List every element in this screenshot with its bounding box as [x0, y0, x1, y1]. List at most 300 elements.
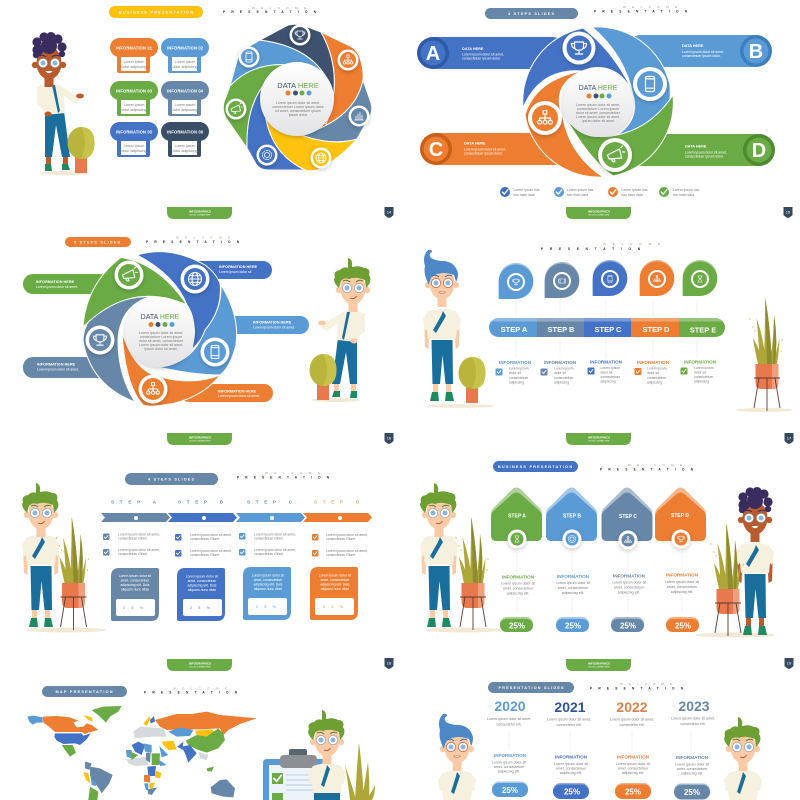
welcome presentation title: PRESENTATION	[594, 10, 688, 14]
bar D: DATA HERE	[685, 144, 707, 148]
year columns: 2020	[494, 698, 526, 714]
centre disc: data here: Lorem ipsum dolor sit amet,	[139, 343, 183, 347]
percentage cards: aliquam nunc vitae	[188, 588, 216, 592]
house step cards: STEP C	[619, 514, 637, 520]
information columns: dolor sit	[509, 371, 521, 375]
year columns: amet, consectetuer	[618, 766, 649, 770]
information columns	[501, 572, 699, 596]
check list row: Lorem Ipsum has	[673, 188, 699, 192]
check list row	[500, 187, 699, 197]
character: man pointing with cactus	[32, 32, 94, 175]
swirl wheel: seven blades	[223, 24, 372, 171]
information columns: adipiscing elit.	[618, 590, 640, 594]
year columns	[487, 698, 715, 800]
welcome presentation title: WELCOME	[620, 682, 672, 686]
card 04: Lorem ipsum	[175, 103, 195, 107]
card 04: INFORMATION 04	[167, 88, 204, 94]
percentage pills	[500, 617, 699, 632]
footer tab	[566, 433, 631, 445]
slide 18: four step arrows	[22, 471, 394, 671]
bar: light blue: INFORMATION HERE	[253, 320, 292, 324]
wheel icons	[226, 24, 370, 168]
clipboard illustration	[263, 749, 328, 800]
centre disc: data here: ipsum dolor sit amet	[582, 119, 614, 123]
centre disc: data here: Lorem ipsum dolor sit amet,	[139, 331, 183, 335]
page number 16	[384, 433, 394, 444]
bar: blue: Lorem ipsum dolor sit	[219, 270, 251, 274]
year columns: INFORMATION	[617, 754, 650, 760]
footer tab: INFOGRAPHICS	[189, 436, 211, 440]
information columns: amet, consectetuer	[614, 586, 645, 590]
centre disc: data here	[563, 67, 633, 137]
centre disc: data here: dolor sit amet, consectetuer	[576, 111, 621, 115]
check list row: two main data	[622, 193, 643, 197]
centre disc: data here: DATA HERE	[141, 314, 180, 321]
year columns: consectetur elit.	[680, 722, 706, 726]
connector dots	[517, 552, 682, 614]
bar B: Lorem ipsum dolor sit amet,	[682, 50, 724, 54]
percentage cards: 25%	[256, 605, 277, 609]
check list row: Lorem Ipsum has	[514, 188, 540, 192]
centre disc: data here: consectetuer Lorem ipsum	[577, 107, 619, 111]
character: man with plant	[308, 710, 375, 800]
information columns: Lorem ipsum dolor sit	[612, 580, 646, 584]
centre disc: data here	[260, 62, 334, 136]
information columns: adipiscing elit.	[562, 591, 584, 595]
chevron timeline	[101, 513, 372, 522]
checklists: consectetuer Etiam.	[190, 553, 220, 557]
check list row: Lorem Ipsum has	[567, 188, 593, 192]
percentage pills: 25%	[675, 622, 691, 630]
centre disc: data here: DATA HERE	[579, 85, 618, 92]
year columns: 25%	[625, 788, 641, 796]
percentage pills: 25%	[620, 622, 636, 630]
page number 17	[784, 433, 794, 444]
bar: blue: INFORMATION HERE	[219, 265, 258, 269]
page number 17: 17	[787, 436, 792, 440]
bar: green: INFORMATION HERE	[36, 280, 75, 284]
step labels: STEP D	[314, 500, 360, 504]
character: man standing	[423, 250, 495, 408]
card 06	[161, 122, 209, 157]
centre disc: data here: consectetuer Lorem ipsum	[140, 335, 182, 339]
checklists: Lorem ipsum dolor sit amet,	[190, 533, 232, 537]
character: man pointing with cactus	[310, 258, 370, 402]
welcome presentation title	[146, 236, 240, 244]
welcome presentation title	[144, 686, 238, 694]
card 01: Lorem ipsum	[124, 60, 144, 64]
information columns: dolor sit	[647, 371, 659, 375]
slide 15: four part wheel	[417, 5, 792, 219]
year columns: Lorem ipsum dolor sit	[492, 760, 526, 764]
year columns: Lorem ipsum dolor sit	[675, 762, 709, 766]
year columns: consectetur elit.	[556, 723, 582, 727]
character: green haired man	[724, 717, 762, 800]
heading pill: business presentation: BUSINESS PRESENTATION	[498, 465, 572, 469]
information columns: amet, consectetuer	[667, 585, 698, 589]
check list row: two main data	[514, 193, 535, 197]
information columns: consectetuer	[647, 376, 667, 380]
centre disc: data here: Lorem ipsum dolor sit amet,	[276, 101, 320, 105]
percentage cards: Lorem ipsum dolor sit	[119, 574, 151, 578]
year columns: consectetur elit.	[619, 723, 645, 727]
check list row: Lorem Ipsum has	[622, 188, 648, 192]
information columns: consectetuer	[509, 376, 529, 380]
welcome presentation title	[590, 682, 684, 690]
percentage pills: 25%	[509, 622, 525, 630]
percentage cards: adipiscing elit. Duis	[320, 582, 350, 586]
welcome presentation title: PRESENTATION	[144, 690, 238, 694]
plant on stand	[736, 298, 792, 412]
house step cards: STEP A	[508, 514, 526, 520]
character: man standing with plant	[420, 483, 503, 632]
year columns: INFORMATION	[494, 753, 527, 758]
welcome presentation title	[237, 471, 330, 480]
information columns: INFORMATION	[613, 574, 646, 578]
information columns: consectetuer	[554, 376, 574, 380]
welcome presentation title: PRESENTATION	[590, 686, 684, 690]
year columns: amet, consectetuer	[677, 767, 708, 771]
year columns: adipiscing elit.	[681, 772, 703, 776]
welcome presentation title: WELCOME	[265, 471, 320, 475]
bar A	[417, 37, 568, 69]
bar C: Lorem ipsum dolor sit amet,	[464, 148, 506, 152]
checklists: consectetuer Etiam.	[254, 536, 284, 540]
welcome presentation title: PRESENTATION	[223, 10, 317, 14]
welcome presentation title	[541, 242, 660, 251]
centre disc: data here: ipsum dolor	[289, 113, 308, 117]
bar C: C	[429, 139, 443, 161]
heading pill: map presentation: MAP PRESENTATION	[56, 690, 113, 694]
percentage cards: 25%	[190, 606, 211, 610]
welcome presentation title: WELCOME	[603, 242, 660, 246]
page number 14	[384, 207, 394, 218]
welcome presentation title	[594, 5, 688, 14]
card 06: INFORMATION 06	[167, 130, 204, 134]
footer tab	[167, 207, 232, 219]
welcome presentation title: PRESENTATION	[146, 240, 240, 244]
year columns: amet, consectetuer	[494, 765, 525, 769]
swirl wheel: five blades	[83, 252, 237, 406]
information columns: INFORMATION	[590, 360, 623, 364]
percentage cards: amet, consectetuer	[121, 578, 150, 582]
card 06: dolor adipiscing	[173, 149, 197, 153]
information columns: adipiscing	[509, 380, 524, 384]
bar: orange	[180, 384, 273, 402]
card 05	[110, 122, 158, 157]
welcome presentation title: WELCOME	[623, 5, 677, 9]
bar D: D	[752, 140, 766, 162]
information columns: adipiscing elit.	[507, 592, 529, 596]
step bar: STEP E	[690, 326, 716, 334]
information columns: adipiscing	[647, 380, 662, 384]
year columns: adipiscing elit.	[560, 771, 582, 775]
checklists: Lorem ipsum dolor sit amet,	[118, 548, 160, 552]
year columns: Lorem ipsum dolor sit amet,	[487, 717, 531, 721]
year columns: consectetur elit.	[496, 722, 522, 726]
bar D: consectetuer ipsum dolor.	[685, 154, 724, 158]
percentage cards: amet, consectetuer	[188, 579, 217, 583]
year columns: adipiscing elit.	[498, 770, 520, 774]
information columns: INFORMATION	[557, 574, 590, 579]
checklists: Lorem ipsum dolor sit amet,	[190, 549, 232, 553]
information columns: INFORMATION	[544, 360, 577, 365]
slide 16: five part wheel	[23, 236, 394, 445]
checklists: consectetuer Etiam.	[326, 537, 356, 541]
percentage cards	[111, 567, 358, 621]
check list row: two main data	[673, 193, 694, 197]
footer tab: INFOGRAPHICS	[588, 436, 610, 440]
bar B: B	[749, 41, 763, 63]
information columns: INFORMATION	[637, 360, 670, 365]
checklists: consectetuer Etiam.	[326, 553, 356, 557]
step bar	[489, 318, 725, 337]
information columns: adipiscing	[554, 380, 569, 384]
page number 18	[384, 658, 394, 669]
centre disc: data here: ipsum dolor sit amet,	[144, 347, 178, 351]
checklists: Lorem ipsum dolor sit amet,	[326, 533, 368, 537]
information columns: Lorem ipsum dolor sit	[556, 581, 590, 585]
footer tab: BLOCKS COMPANY HERE	[589, 666, 610, 668]
footer tab: INFOGRAPHICS	[588, 210, 610, 214]
bar C: consectetuer ipsum dolor.	[464, 152, 503, 156]
information columns: Lorem ipsum	[647, 366, 667, 370]
world map	[27, 706, 257, 800]
welcome presentation title: PRESENTATION	[541, 247, 641, 251]
year columns: Lorem ipsum dolor sit	[616, 762, 650, 766]
card 01	[110, 38, 158, 73]
house step cards: STEP D	[671, 513, 689, 519]
percentage cards: aliquam nunc vitae	[254, 587, 282, 591]
information columns: Lorem ipsum dolor sit	[501, 582, 535, 586]
slide: timeline years	[438, 682, 762, 800]
character: blue haired man	[438, 714, 476, 800]
information columns: consectetuer	[600, 375, 621, 379]
welcome presentation title: PRESENTATION	[600, 468, 694, 472]
checklists: Lorem ipsum dolor sit amet,	[118, 532, 160, 536]
footer tab	[566, 659, 631, 671]
bar: blue	[170, 261, 272, 279]
footer tab: BLOCKS COMPANY HERE	[589, 440, 610, 442]
checklists: consectetuer Etiam.	[254, 552, 284, 556]
page number 19	[784, 658, 794, 669]
page number 19: 19	[787, 660, 792, 666]
information columns: INFORMATION	[684, 360, 717, 364]
page number 18: 18	[387, 660, 392, 666]
bar: light blue	[215, 316, 309, 334]
heading pill: 4 steps slides: 4 STEPS SLIDES	[148, 478, 195, 482]
slide 19: four step houses	[420, 461, 794, 671]
card 06: Lorem ipsum	[175, 144, 195, 148]
centre disc: data here: consectetuer Lorem ipsum dolor	[272, 105, 324, 109]
information columns: dolor sit	[554, 371, 566, 375]
footer tab: BLOCKS COMPANY HERE	[190, 214, 211, 216]
year columns: 2022	[616, 699, 648, 715]
wheel icons	[528, 32, 667, 172]
card 05: Lorem ipsum	[124, 144, 144, 148]
percentage cards: adipiscing elit. Duis	[120, 583, 150, 587]
heading pill: 5 steps slides	[65, 237, 131, 247]
information columns: Lorem ipsum	[509, 366, 529, 370]
year columns: amet, consectetuer	[556, 766, 587, 770]
slide: map presentation	[27, 686, 375, 800]
bar: slate: INFORMATION HERE	[37, 362, 76, 366]
information columns: adipiscing	[694, 380, 709, 384]
year columns: 2023	[678, 698, 710, 714]
welcome presentation title: WELCOME	[252, 6, 306, 10]
percentage cards: Lorem ipsum dolor sit	[186, 574, 218, 578]
heading pill: map presentation	[42, 686, 127, 697]
card 04: dolor adipiscing	[173, 108, 197, 112]
bar A: A	[426, 43, 440, 65]
bar C: DATA HERE	[464, 142, 486, 146]
step labels: STEP A	[111, 500, 157, 504]
welcome presentation title	[600, 463, 694, 472]
year columns: Lorem ipsum dolor sit amet,	[671, 716, 715, 720]
checklists	[103, 532, 368, 557]
footer tab: BLOCKS COMPANY HERE	[190, 666, 211, 668]
centre disc: data here: Lorem ipsum dolor sit amet,	[576, 103, 620, 107]
heading pill: 4 steps slides: 4 STEPS SLIDES	[508, 12, 555, 16]
footer tab: INFOGRAPHICS	[189, 662, 211, 666]
step bar: STEP C	[595, 325, 622, 334]
heading pill: business presentation	[493, 461, 578, 472]
footer tab: BLOCKS COMPANY HERE	[190, 440, 211, 442]
card 01: dolor adipiscing	[122, 65, 146, 69]
centre disc: data here: DATA HERE	[277, 81, 319, 90]
page number 14: 14	[387, 210, 392, 214]
percentage pills: 25%	[565, 622, 581, 630]
information columns: consectetuer	[694, 375, 714, 379]
bar A: Lorem ipsum dolor sit amet,	[462, 52, 504, 56]
information columns: INFORMATION	[666, 572, 699, 578]
bar C	[420, 133, 571, 165]
percentage cards: amet, consectetuer	[254, 578, 283, 582]
card 03: Lorem ipsum	[124, 103, 144, 107]
footer tab	[566, 207, 631, 219]
checklists: consectetuer Etiam.	[190, 537, 220, 541]
card 05: INFORMATION 05	[116, 130, 153, 134]
percentage cards: 25%	[323, 605, 344, 609]
heading pill: 4 steps slides	[485, 8, 578, 19]
information columns: Lorem ipsum dolor sit	[665, 580, 699, 584]
step bar: STEP A	[501, 325, 528, 334]
year columns: 2021	[554, 699, 586, 715]
bar: orange: INFORMATION HERE	[218, 390, 257, 394]
house step cards: STEP B	[563, 514, 581, 520]
percentage cards: 25%	[123, 606, 144, 610]
heading pill: presentation slides: PRESENTATION SLIDES	[498, 686, 564, 690]
bar: light blue: Lorem ipsum dolor sit amet,	[253, 326, 295, 330]
year columns: Lorem ipsum dolor sit amet,	[547, 718, 591, 722]
year columns: Lorem ipsum dolor sit amet,	[610, 718, 654, 722]
year columns: INFORMATION	[555, 754, 588, 760]
centre disc: data here: Lorem ipsum dolor sit amet,	[576, 115, 620, 119]
information cards	[110, 38, 209, 157]
centre disc: data here	[125, 297, 195, 367]
information columns: Lorem ipsum	[554, 366, 574, 370]
slide 17: five step timeline	[423, 242, 794, 445]
year columns: Lorem ipsum dolor sit	[554, 762, 588, 766]
card 05: dolor adipiscing	[122, 149, 146, 153]
bar: orange: Lorem ipsum dolor sit amet,	[218, 394, 260, 398]
checklists: consectetuer Etiam.	[118, 536, 148, 540]
information columns: amet, consectetuer	[558, 586, 589, 590]
card 02: Lorem ipsum	[175, 60, 195, 64]
check list row: two main data	[567, 193, 588, 197]
step bar: STEP B	[548, 325, 575, 334]
card 02: dolor adipiscing	[173, 65, 197, 69]
bar B: consectetuer ipsum dolor.	[682, 54, 721, 58]
information columns: INFORMATION	[499, 360, 532, 365]
information columns: Lorem ipsum	[600, 366, 620, 370]
step labels	[111, 500, 360, 504]
bar D: Lorem ipsum dolor sit amet,	[685, 150, 727, 154]
percentage cards: aliquam nunc vitae	[321, 587, 349, 591]
footer tab: INFOGRAPHICS	[588, 662, 610, 666]
character: dark haired man with plant	[695, 487, 775, 638]
swirl wheel: four blades	[523, 27, 673, 177]
card 03: dolor adipiscing	[122, 108, 146, 112]
footer tab: BLOCKS COMPANY HERE	[589, 214, 610, 216]
information columns: amet, consectetuer	[503, 586, 534, 590]
checklists: Lorem ipsum dolor sit amet,	[326, 549, 368, 553]
connector dots	[516, 300, 697, 358]
bar A: DATA HERE	[462, 47, 484, 51]
house step cards	[491, 488, 706, 550]
information columns: Lorem ipsum	[694, 366, 714, 370]
percentage cards: adipiscing elit. Duis	[253, 582, 283, 586]
checklists: consectetuer Etiam.	[118, 552, 148, 556]
welcome presentation title: WELCOME	[628, 463, 682, 467]
percentage cards: aliquam nunc vitae	[121, 588, 149, 592]
card 03	[110, 81, 158, 116]
information columns: dolor sit	[694, 370, 706, 374]
information columns: adipiscing elit.	[671, 590, 693, 594]
information columns: INFORMATION	[502, 574, 535, 580]
card 01: INFORMATION 01	[116, 46, 153, 50]
footer tab: INFOGRAPHICS	[189, 210, 211, 214]
bar: slate	[23, 357, 113, 378]
card 03: INFORMATION 03	[116, 88, 153, 94]
percentage cards: Lorem ipsum dolor sit	[252, 574, 284, 578]
bar B	[625, 35, 772, 67]
year columns: INFORMATION	[676, 755, 709, 760]
step labels: STEP C	[247, 500, 293, 504]
welcome presentation title: PRESENTATION	[237, 476, 330, 480]
centre disc: data here: sit amet, consectetuer ipsum	[275, 109, 321, 113]
bar B: DATA HERE	[682, 44, 704, 48]
welcome presentation title: WELCOME	[173, 686, 227, 690]
bar: green: Lorem ipsum dolor sit amet,	[36, 285, 78, 289]
heading pill: 5 steps slides: 5 STEPS SLIDES	[74, 240, 121, 244]
bar: slate: Lorem ipsum dolor sit amet,	[37, 368, 79, 372]
character: man standing with plant	[22, 483, 106, 632]
percentage cards: Lorem ipsum dolor sit	[319, 574, 351, 578]
year columns: 25%	[564, 788, 580, 796]
page number 15: 15	[786, 210, 791, 214]
welcome presentation title: WELCOME	[176, 236, 230, 240]
icon: cactus	[458, 357, 486, 403]
step labels: STEP B	[178, 500, 224, 504]
percentage cards: adipiscing elit. Duis	[187, 584, 217, 588]
information columns: dolor sit	[600, 370, 612, 374]
slide 14: six step wheel	[32, 6, 394, 219]
card 04	[161, 81, 209, 116]
heading pill: business presentation: BUSINESS PRESENTATION	[119, 10, 193, 14]
year columns: 25%	[684, 788, 700, 797]
year columns: 25%	[502, 786, 518, 795]
